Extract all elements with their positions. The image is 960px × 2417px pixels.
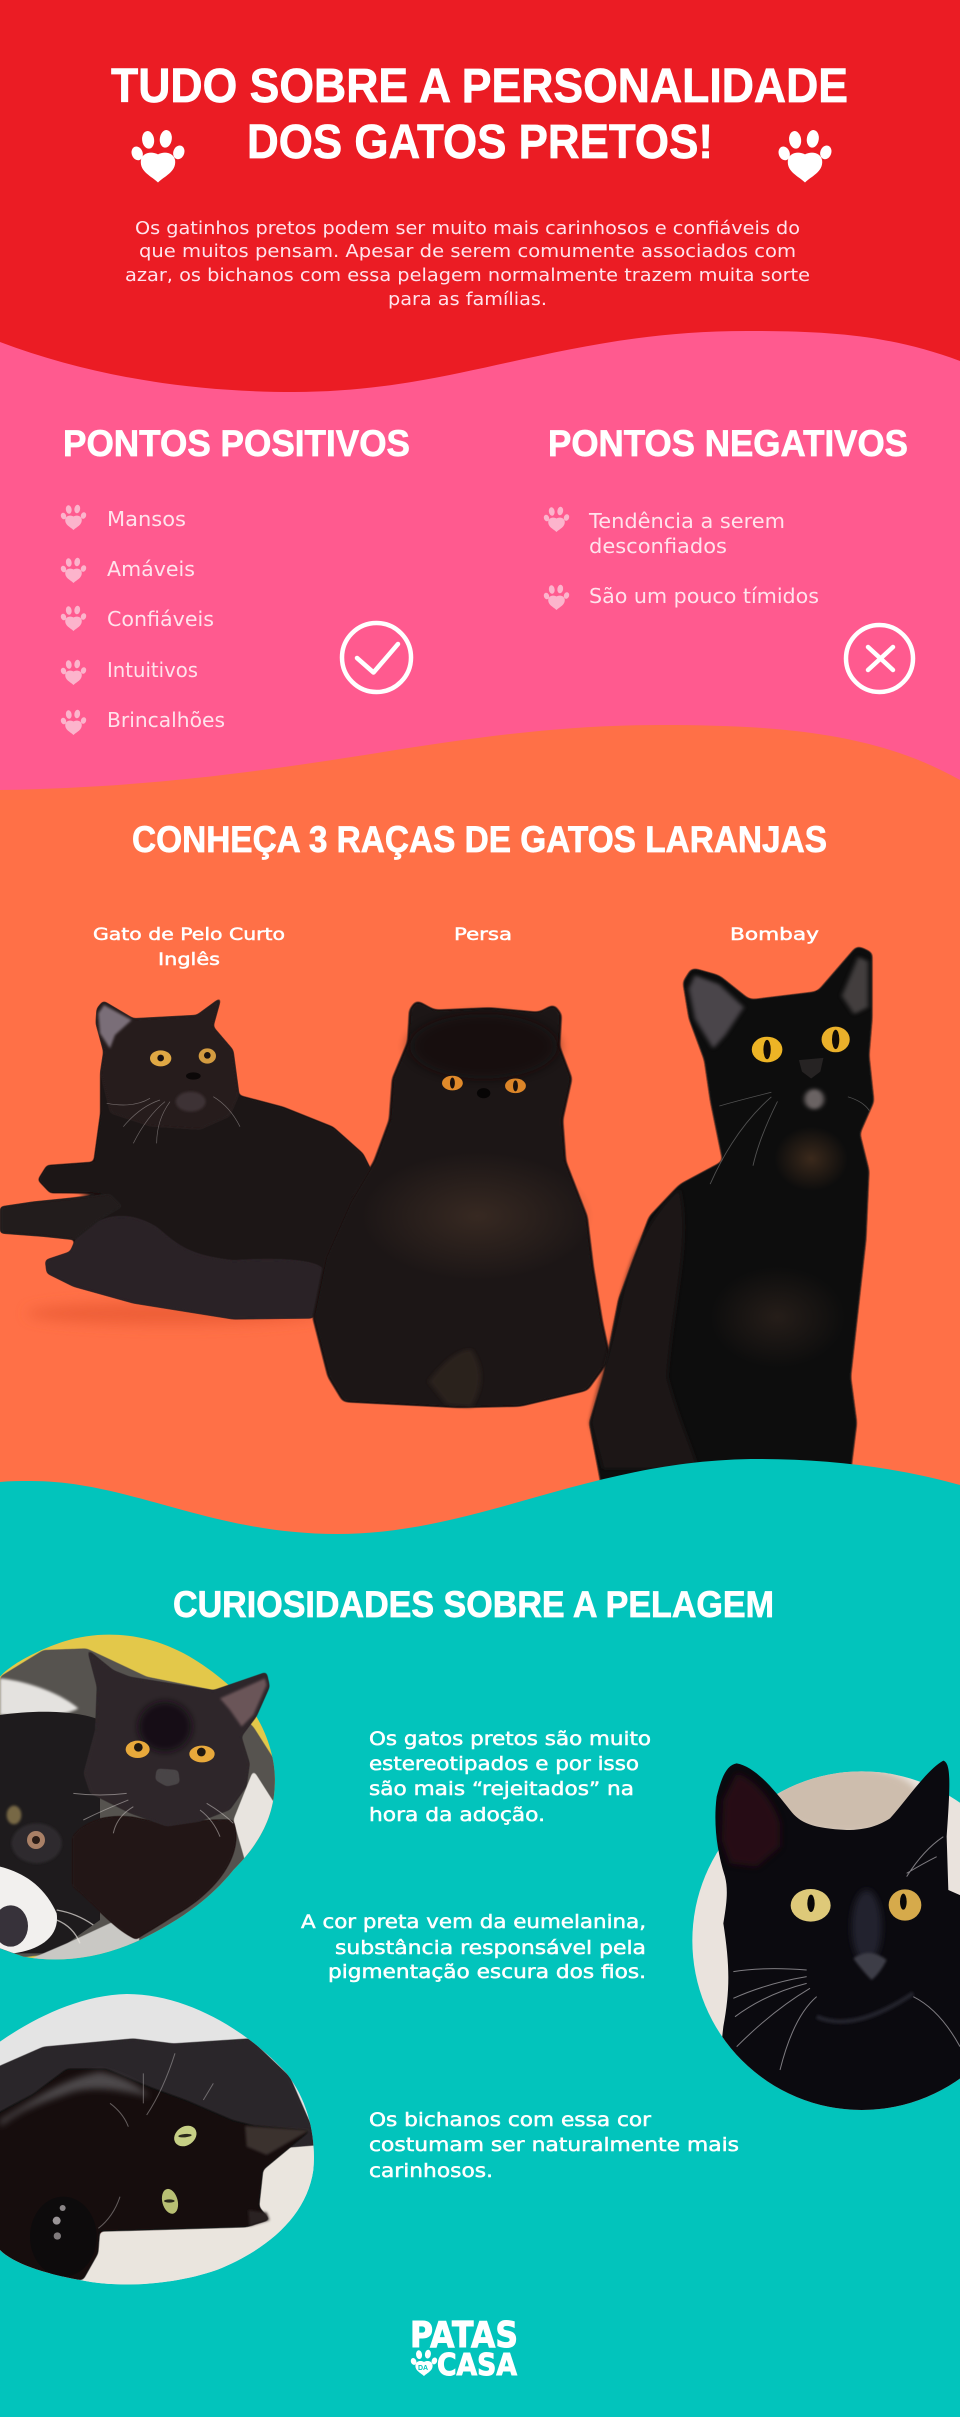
text: fact 3: carinhosos. <box>369 2160 493 2182</box>
list: positive traits <box>60 504 225 735</box>
list: positive traits: Intuitivos <box>107 658 198 682</box>
list: positive traits: Amáveis <box>107 557 195 581</box>
logo: PATAS <box>410 2315 518 2356</box>
text: fact 2: pigmentação escura dos fios. <box>328 1961 646 1983</box>
text: fact 3 <box>369 2109 739 2182</box>
text: fact 1: são mais “rejeitados” na <box>369 1778 634 1800</box>
photo: cat and dog <box>0 1634 275 1960</box>
logo: CASA <box>437 2348 518 2383</box>
text: fact 2: substância responsável pela <box>335 1937 646 1959</box>
list: positive traits: Brincalhões <box>107 708 225 732</box>
list: negative traits <box>543 506 819 610</box>
title <box>111 60 848 169</box>
list: positive traits: Mansos <box>107 507 186 531</box>
intro paragraph: para as famílias. <box>388 289 547 310</box>
text: fact 2: A cor preta vem da eumelanina, <box>301 1911 646 1933</box>
label: breed 1 <box>93 925 285 970</box>
text: fact 3: Os bichanos com essa cor <box>369 2109 651 2131</box>
text: fact 2 <box>301 1911 646 1983</box>
list: negative traits: desconfiados <box>589 534 727 558</box>
icon: left paw <box>130 129 186 182</box>
text: fact 3: costumam ser naturalmente mais <box>369 2134 739 2156</box>
section: orange band <box>0 725 960 1540</box>
title: TUDO SOBRE A PERSONALIDADE <box>111 60 848 113</box>
title: DOS GATOS PRETOS! <box>247 116 713 169</box>
intro paragraph <box>125 218 810 310</box>
heading: pontos positivos: PONTOS POSITIVOS <box>63 423 410 464</box>
photo: cat lying on bed <box>0 1990 330 2290</box>
heading: curiosidades: CURIOSIDADES SOBRE A PELAGEM <box>173 1584 774 1625</box>
icon: cross circle <box>846 625 913 692</box>
list: negative traits: Tendência a serem <box>588 509 785 533</box>
logo: DA <box>418 2365 428 2372</box>
intro paragraph: que muitos pensam. Apesar de serem comumente associados com <box>139 241 796 262</box>
cat: bombay <box>589 945 874 1496</box>
icon: check circle <box>342 623 411 692</box>
cat: british shorthair <box>0 997 372 1325</box>
label: breed 2: Persa <box>454 925 512 945</box>
photo: cat portrait <box>692 1761 960 2117</box>
section: pink band <box>0 331 960 800</box>
label: breed 1: Inglês <box>158 950 220 970</box>
heading: pontos negativos: PONTOS NEGATIVOS <box>548 423 908 464</box>
list: positive traits: Confiáveis <box>107 607 214 631</box>
text: fact 1: hora da adoção. <box>369 1804 545 1826</box>
section: teal band <box>0 1459 960 2417</box>
panel: pontos positivos <box>60 423 411 735</box>
list: negative traits: São um pouco tímidos <box>589 584 819 608</box>
label: breed 3: Bombay <box>730 925 819 945</box>
label: breed 1: Gato de Pelo Curto <box>93 925 285 945</box>
logo <box>410 2315 518 2383</box>
text: fact 1: estereotipados e por isso <box>369 1753 639 1775</box>
text: fact 1 <box>369 1728 651 1826</box>
panel: pontos negativos <box>543 423 913 692</box>
intro paragraph: Os gatinhos pretos podem ser muito mais carinhosos e confiáveis do <box>135 218 800 239</box>
icon: right paw <box>777 129 833 182</box>
intro paragraph: azar, os bichanos com essa pelagem normalmente trazem muita sorte <box>125 265 810 286</box>
text: fact 1: Os gatos pretos são muito <box>369 1728 651 1750</box>
cat: persian <box>312 999 611 1408</box>
background: red header section <box>0 0 960 420</box>
heading: breeds: CONHEÇA 3 RAÇAS DE GATOS LARANJAS <box>132 819 827 860</box>
